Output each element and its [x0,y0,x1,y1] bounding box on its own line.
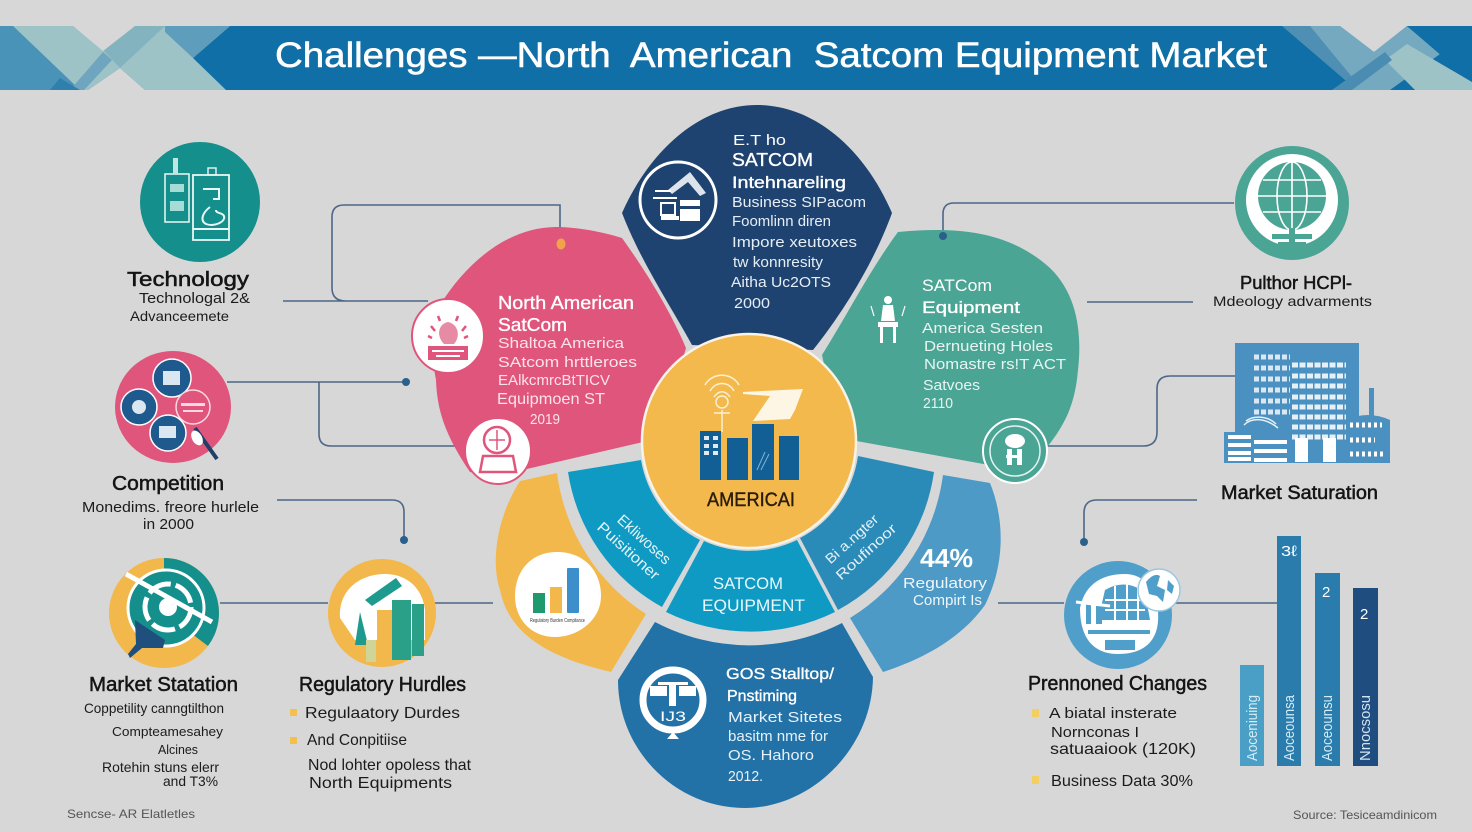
panel: yellow chart segment [496,473,646,672]
rotated text: Roufinoor [832,520,900,583]
icon: building [1224,343,1390,463]
pink text [497,293,637,428]
heading: Competition [112,473,224,495]
icon: market dial [109,558,219,668]
description: Advanceemete [130,308,229,324]
panel: prenoned changes item [1028,561,1207,790]
bar chart: Nnocsosu [1357,695,1374,761]
navy text: SATCOM [732,150,813,170]
center segment text: EQUIPMENT [702,596,805,615]
panel: regulatory hurdles item [290,559,472,792]
panel: satcom equipment ring segment [666,540,835,632]
description: and T3% [163,773,218,789]
panel: light blue regulatory segment [850,475,1001,672]
navy text: Intehnareling [732,173,846,192]
description [130,290,250,324]
panel: blue left ring segment [568,460,700,607]
panel: teal satcom equipment [822,230,1079,483]
panel: blue right ring segment [800,456,934,610]
panel: technology item [127,142,260,324]
regulatory stat [903,543,988,609]
panel: pulthor item [1213,146,1372,309]
navy text: tw konnresity [733,254,823,271]
bullet list [290,705,472,792]
bottom text: GOS Stalltop/ [726,666,835,683]
bottom text: Pnstiming [727,688,797,705]
icon: gos badge: IJ3 [660,708,686,724]
bottom text: Market Sitetes [728,709,842,726]
description: Monedims. freore hurlele [82,499,259,516]
description: Alcines [158,742,198,757]
icon: building bars [700,424,799,480]
hub label: AMERICAI [707,490,795,511]
teal text: Nomastre rs!T ACT [924,356,1066,373]
navy text [731,132,866,312]
pink text: Shaltoa America [498,335,625,352]
icon: changes globe [1064,561,1180,669]
teal text: Dernueting Holes [924,338,1053,355]
bullet list: Regulaatory Durdes [305,705,460,722]
title: Challenges —North American Satcom Equipment Market [275,36,1267,75]
panel: pink north american satcom [412,227,686,484]
navy text: Impore xeutoxes [732,234,857,251]
bullet list [1032,705,1196,790]
bar chart: Aoceniuing [1244,695,1261,761]
bar chart: Aoceounsu [1319,695,1336,761]
icon: pink circle bottom [465,418,531,484]
icon: phones [140,142,260,262]
title banner [0,26,1472,90]
bar chart: Aoceounsa [1281,694,1298,761]
center segment text: SATCOM [713,574,783,593]
navy text: Business SIPacom [732,194,866,211]
pink text: SatCom [498,315,567,335]
panel: market saturation item [1221,343,1390,504]
regulatory stat: 44% [920,543,973,573]
bar chart [1240,536,1378,766]
description: Technologal 2& [139,290,250,307]
bottom text: 2012. [728,768,763,785]
regulatory stat: Compirt Is [913,592,982,609]
description: Compteamesahey [112,724,224,739]
panel: bottom blue gos segment [618,622,873,808]
description: in 2000 [143,516,194,533]
navy text: E.T ho [733,132,786,149]
teal text: America Sesten [922,320,1043,337]
description [82,499,259,533]
source right: Source: Tesiceamdinicom [1293,808,1437,822]
bullet list: Nod lohter opoless that [308,757,472,774]
heading: Regulatory Hurdles [299,674,466,696]
bottom text: OS. Hahoro [728,747,814,764]
bullet list: Nornconas I [1051,724,1139,741]
icon: regulatory buildings [328,559,436,667]
teal text: SATCom [922,276,992,295]
pink text: Equipmoen ST [497,391,605,408]
heading: Market Saturation [1221,483,1378,504]
panel: market station item [84,558,238,789]
panel: competition item [82,351,259,533]
icon: signal [705,375,739,432]
rotated text [593,505,675,584]
connector lines [220,203,1277,603]
dot [939,232,947,240]
icon: teal circle bottom [983,419,1047,483]
heading: Prennoned Changes [1028,673,1207,695]
pink text: EAlkcmrcBtTICV [498,372,610,389]
icon: dish [743,389,803,421]
rotated text [820,506,900,583]
rotated text: Bi a.ngter [822,511,882,567]
description: Coppetility canngtilthon [84,700,224,716]
center segment text [702,574,805,615]
description: Mdeology advarments [1213,293,1372,309]
icon: mini bar chart: Regulatory Burden Compliance [530,618,585,624]
panel: navy satcom internetworking [622,105,892,350]
heading: Pulthor HCPl- [1240,273,1352,293]
icon: figure [871,296,905,343]
rotated text: Ekliwoses [614,511,674,568]
pink text: SAtcom hrttleroes [498,354,637,371]
teal text: Equipment [922,298,1020,317]
icon: pink circle top [412,299,484,373]
icon: competition cluster [115,351,231,463]
bottom text [726,666,842,785]
icon: navy circle [640,162,716,238]
dot [556,238,566,250]
rotated text: Puisitioner [593,519,663,584]
teal text: 2110 [923,395,953,412]
panel: center hub [642,334,856,548]
pink text: North American [498,293,634,313]
description [84,700,224,789]
bar chart: 2 [1322,584,1330,601]
regulatory stat: Regulatory [903,575,988,592]
heading: Technology [127,269,249,291]
bullet list: Business Data 30% [1051,773,1193,790]
navy text: Foomlinn diren [732,213,831,230]
source left: Sencse- AR Elatletles [67,807,195,821]
bar chart: 3ℓ [1281,543,1297,560]
icon: gos badge [643,670,703,739]
bullet list: A biatal insterate [1049,705,1177,722]
icon: mini bar chart [515,552,601,637]
description: Rotehin stuns elerr [102,759,219,775]
icon: globe [1235,146,1349,260]
bar chart: 2 [1360,606,1368,623]
teal text: Satvoes [923,377,980,394]
heading: Market Statation [89,674,238,696]
bullet list: satuaaiook (120K) [1050,741,1196,758]
teal text [922,276,1066,412]
bullet list: North Equipments [309,775,452,792]
bullet list: And Conpitiise [307,732,407,749]
bottom text: basitm nme for [728,728,828,745]
navy text: Aitha Uc2OTS [731,274,831,291]
navy text: 2000 [734,295,770,312]
pink text: 2019 [530,411,560,428]
